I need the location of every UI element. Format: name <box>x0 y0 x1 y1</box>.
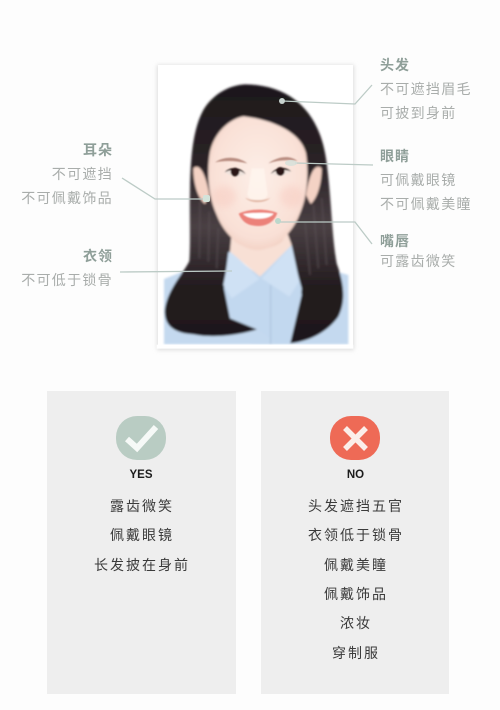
label: lips: 可露齿微笑 <box>380 253 456 269</box>
label: collar: 不可低于锁骨 <box>21 272 113 288</box>
no list <box>308 498 404 661</box>
photo lower edge mask <box>157 345 353 349</box>
yes list: 露齿微笑 <box>110 498 174 514</box>
label: hair: 可披到身前 <box>380 105 456 121</box>
no list: 头发遮挡五官 <box>308 498 404 514</box>
label: ears: 不可遮挡 <box>52 166 113 182</box>
label: ears <box>21 142 113 206</box>
label: hair <box>380 57 472 121</box>
hair strands <box>199 198 327 275</box>
no list: 佩戴饰品 <box>324 586 388 602</box>
callout line: lips <box>275 218 372 244</box>
label: eyes <box>380 148 472 212</box>
yes list <box>94 498 190 573</box>
no list: 穿制服 <box>332 645 380 661</box>
icon: check mark <box>116 416 166 460</box>
label: ears: 耳朵 <box>83 142 113 158</box>
portrait photo <box>157 84 353 349</box>
no list: 浓妆 <box>340 615 372 631</box>
callout line: collar <box>120 271 232 272</box>
brows <box>215 158 247 163</box>
cheeks <box>212 186 236 207</box>
no list: 衣领低于锁骨 <box>308 527 404 543</box>
callout line: hair <box>279 85 372 104</box>
label: collar: 衣领 <box>83 248 113 264</box>
label: collar <box>21 248 113 288</box>
label: eyes: 眼睛 <box>380 148 410 164</box>
shoulders <box>164 270 348 344</box>
eyes <box>225 169 245 176</box>
callout line: ears <box>122 178 210 202</box>
icon: cross mark <box>330 416 380 460</box>
ears <box>193 167 209 204</box>
shirt <box>224 245 302 344</box>
panel: yes <box>47 391 236 694</box>
label: eyes: 可佩戴眼镜 <box>380 172 456 188</box>
label: lips <box>380 233 456 269</box>
hair <box>165 84 343 343</box>
label: eyes: 不可佩戴美瞳 <box>380 196 472 212</box>
lips and teeth <box>239 210 277 226</box>
label: lips: 嘴唇 <box>380 233 410 249</box>
portrait photo card <box>157 65 354 350</box>
no heading: NO <box>347 469 364 481</box>
callout line: eyes <box>285 160 373 166</box>
yes list: 佩戴眼镜 <box>110 527 174 543</box>
neck <box>230 222 292 277</box>
face <box>208 116 307 250</box>
nose <box>247 168 268 201</box>
yes list: 长发披在身前 <box>94 557 190 573</box>
panel: no <box>261 391 449 694</box>
label: hair: 不可遮挡眉毛 <box>380 81 472 97</box>
yes heading: YES <box>129 469 153 481</box>
no list: 佩戴美瞳 <box>324 557 388 573</box>
label: ears: 不可佩戴饰品 <box>21 190 113 206</box>
label: hair: 头发 <box>380 57 410 73</box>
